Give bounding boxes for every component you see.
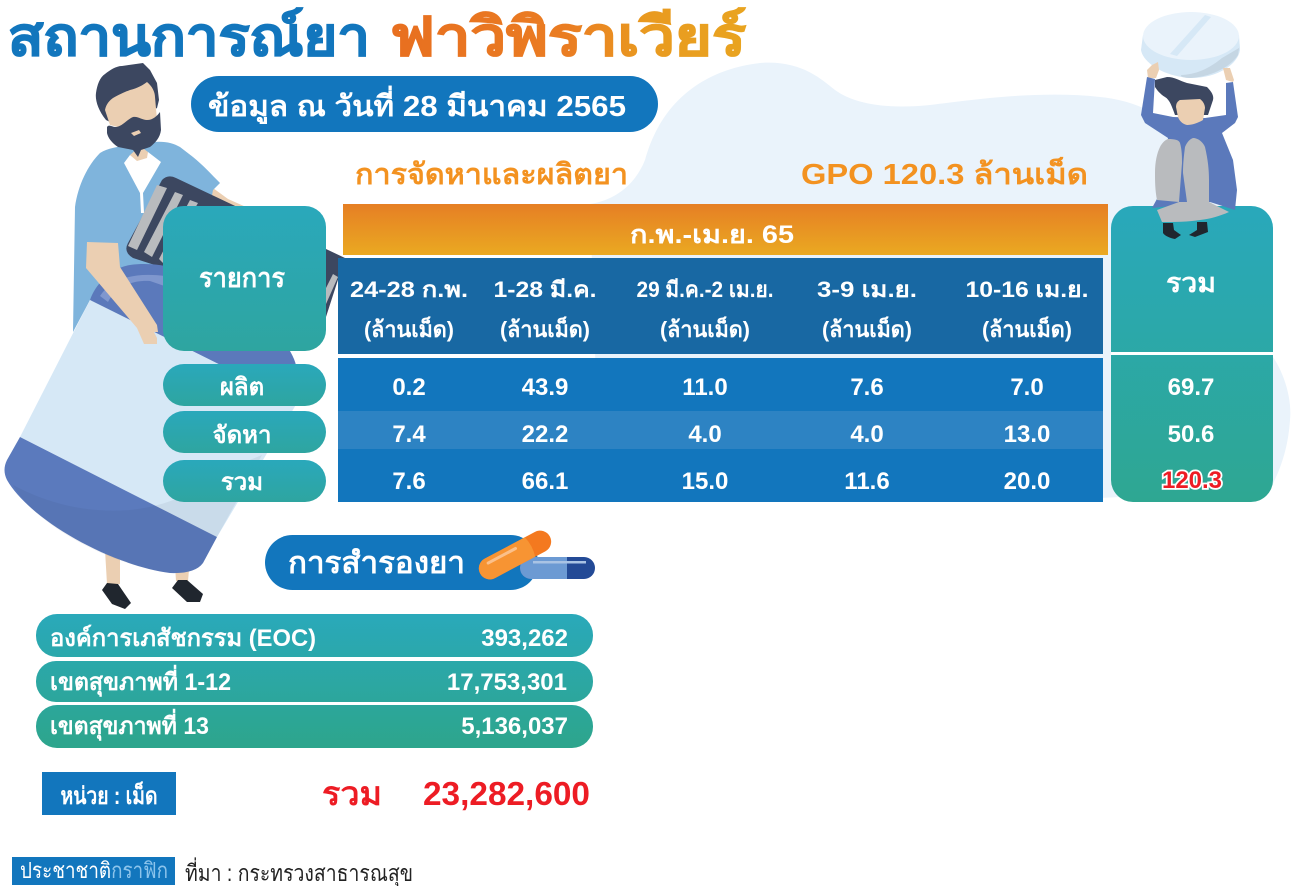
reserve heading: การสำรองยา bbox=[288, 547, 465, 580]
unit label: หน่วย : เม็ด bbox=[60, 781, 158, 810]
table data: 7.6 bbox=[850, 374, 884, 401]
heading: procurement: GPO 120.3 ล้านเม็ด bbox=[801, 156, 1088, 191]
table column headers: (ล้านเม็ด) bbox=[364, 315, 454, 342]
footer source: ที่มา : กระทรวงสาธารณสุข bbox=[185, 857, 413, 886]
footer source bbox=[12, 857, 413, 886]
table data: 11.0 bbox=[682, 374, 728, 401]
row: health regions 1-12 bbox=[36, 661, 593, 702]
bottle body bbox=[20, 300, 297, 537]
title: ฟาวิพิราเวียร์ bbox=[390, 8, 747, 67]
heading: procurement: การจัดหาและผลิตยา bbox=[355, 159, 628, 191]
grand total: รวม bbox=[322, 775, 382, 812]
date pill: ข้อมูล ณ วันที่ 28 มีนาคม 2565 bbox=[208, 85, 626, 124]
row: health region 13: 5,136,037 bbox=[461, 713, 568, 740]
grand total bbox=[322, 775, 590, 812]
table column headers: 29 มี.ค.-2 เม.ย. bbox=[636, 277, 774, 302]
table data bbox=[338, 358, 1103, 502]
reserve heading bbox=[265, 527, 595, 590]
legs bbox=[105, 550, 189, 584]
row: health region 13: เขตสุขภาพที่ 13 bbox=[50, 708, 209, 742]
label: procure: จัดหา bbox=[213, 422, 271, 449]
label: total bbox=[163, 460, 326, 502]
table data: 7.6 bbox=[392, 468, 426, 495]
table data: 13.0 bbox=[1004, 421, 1050, 448]
table column headers bbox=[338, 258, 1103, 354]
table data: 15.0 bbox=[682, 468, 728, 495]
sweater bbox=[1141, 77, 1238, 210]
face bbox=[1176, 99, 1205, 125]
label: procure bbox=[163, 411, 326, 453]
icon: blue capsule bbox=[520, 557, 595, 579]
label: total: รวม bbox=[221, 469, 263, 496]
total column bbox=[1111, 206, 1273, 502]
unit label bbox=[42, 772, 176, 815]
table column headers: (ล้านเม็ด) bbox=[982, 315, 1072, 342]
shoes bbox=[102, 580, 203, 609]
table data: 11.6 bbox=[844, 468, 890, 495]
table data: 7.4 bbox=[392, 421, 426, 448]
total column: รวม bbox=[1166, 268, 1216, 298]
table column headers: (ล้านเม็ด) bbox=[822, 315, 912, 342]
header label: รายการ bbox=[199, 263, 285, 293]
row: EOC bbox=[36, 614, 593, 657]
grand total: 23,282,600 bbox=[423, 775, 590, 812]
header label bbox=[163, 206, 326, 351]
hands bbox=[1147, 62, 1234, 82]
table column headers: 1-28 มี.ค. bbox=[494, 277, 596, 302]
total column: 50.6 bbox=[1168, 421, 1214, 448]
table column headers: 10-16 เม.ย. bbox=[966, 277, 1088, 302]
title: สถานการณ์ยา bbox=[8, 8, 370, 67]
row: EOC: องค์การเภสัชกรรม (EOC) bbox=[50, 624, 316, 652]
table data: 7.0 bbox=[1010, 374, 1044, 401]
knees and legs bbox=[1155, 138, 1229, 222]
row labels bbox=[163, 206, 326, 502]
reserve list bbox=[36, 614, 593, 748]
total column: 120.3 bbox=[1162, 467, 1222, 494]
illustration: man holding bottle bbox=[4, 63, 345, 609]
icon: orange capsule bbox=[475, 527, 555, 583]
background blob bbox=[590, 63, 1290, 498]
table data: 4.0 bbox=[688, 421, 722, 448]
period header bbox=[343, 204, 1108, 255]
total column: 69.7 bbox=[1168, 374, 1214, 401]
table data: 20.0 bbox=[1004, 468, 1050, 495]
table data: 4.0 bbox=[850, 421, 884, 448]
title bbox=[8, 8, 747, 67]
row: health regions 1-12: 17,753,301 bbox=[447, 669, 567, 696]
table column headers: 24-28 ก.พ. bbox=[350, 277, 468, 302]
table data: 22.2 bbox=[522, 421, 568, 448]
table column headers: 3-9 เม.ย. bbox=[817, 277, 917, 302]
table data: 0.2 bbox=[392, 374, 426, 401]
heading: procurement bbox=[355, 156, 1088, 191]
period header: ก.พ.-เม.ย. 65 bbox=[630, 221, 794, 249]
arm and hand bbox=[86, 242, 158, 344]
row: EOC: 393,262 bbox=[481, 625, 568, 652]
bottle cap bbox=[126, 176, 345, 320]
table column headers: (ล้านเม็ด) bbox=[500, 315, 590, 342]
footer source: ประชาชาติกราฟิก bbox=[20, 858, 168, 883]
feet bbox=[1163, 222, 1208, 239]
pill bbox=[1141, 12, 1240, 78]
row: health regions 1-12: เขตสุขภาพที่ 1-12 bbox=[50, 664, 231, 698]
hair bbox=[1155, 77, 1213, 115]
date pill bbox=[191, 76, 658, 132]
illustration: person holding pill bbox=[1141, 12, 1240, 239]
table data: 66.1 bbox=[522, 468, 568, 495]
bottle shoulder bbox=[90, 264, 297, 455]
label: produce bbox=[163, 364, 326, 406]
row: health region 13 bbox=[36, 705, 593, 748]
label: produce: ผลิต bbox=[220, 374, 264, 401]
table column headers: (ล้านเม็ด) bbox=[660, 315, 750, 342]
table data: 43.9 bbox=[522, 374, 568, 401]
